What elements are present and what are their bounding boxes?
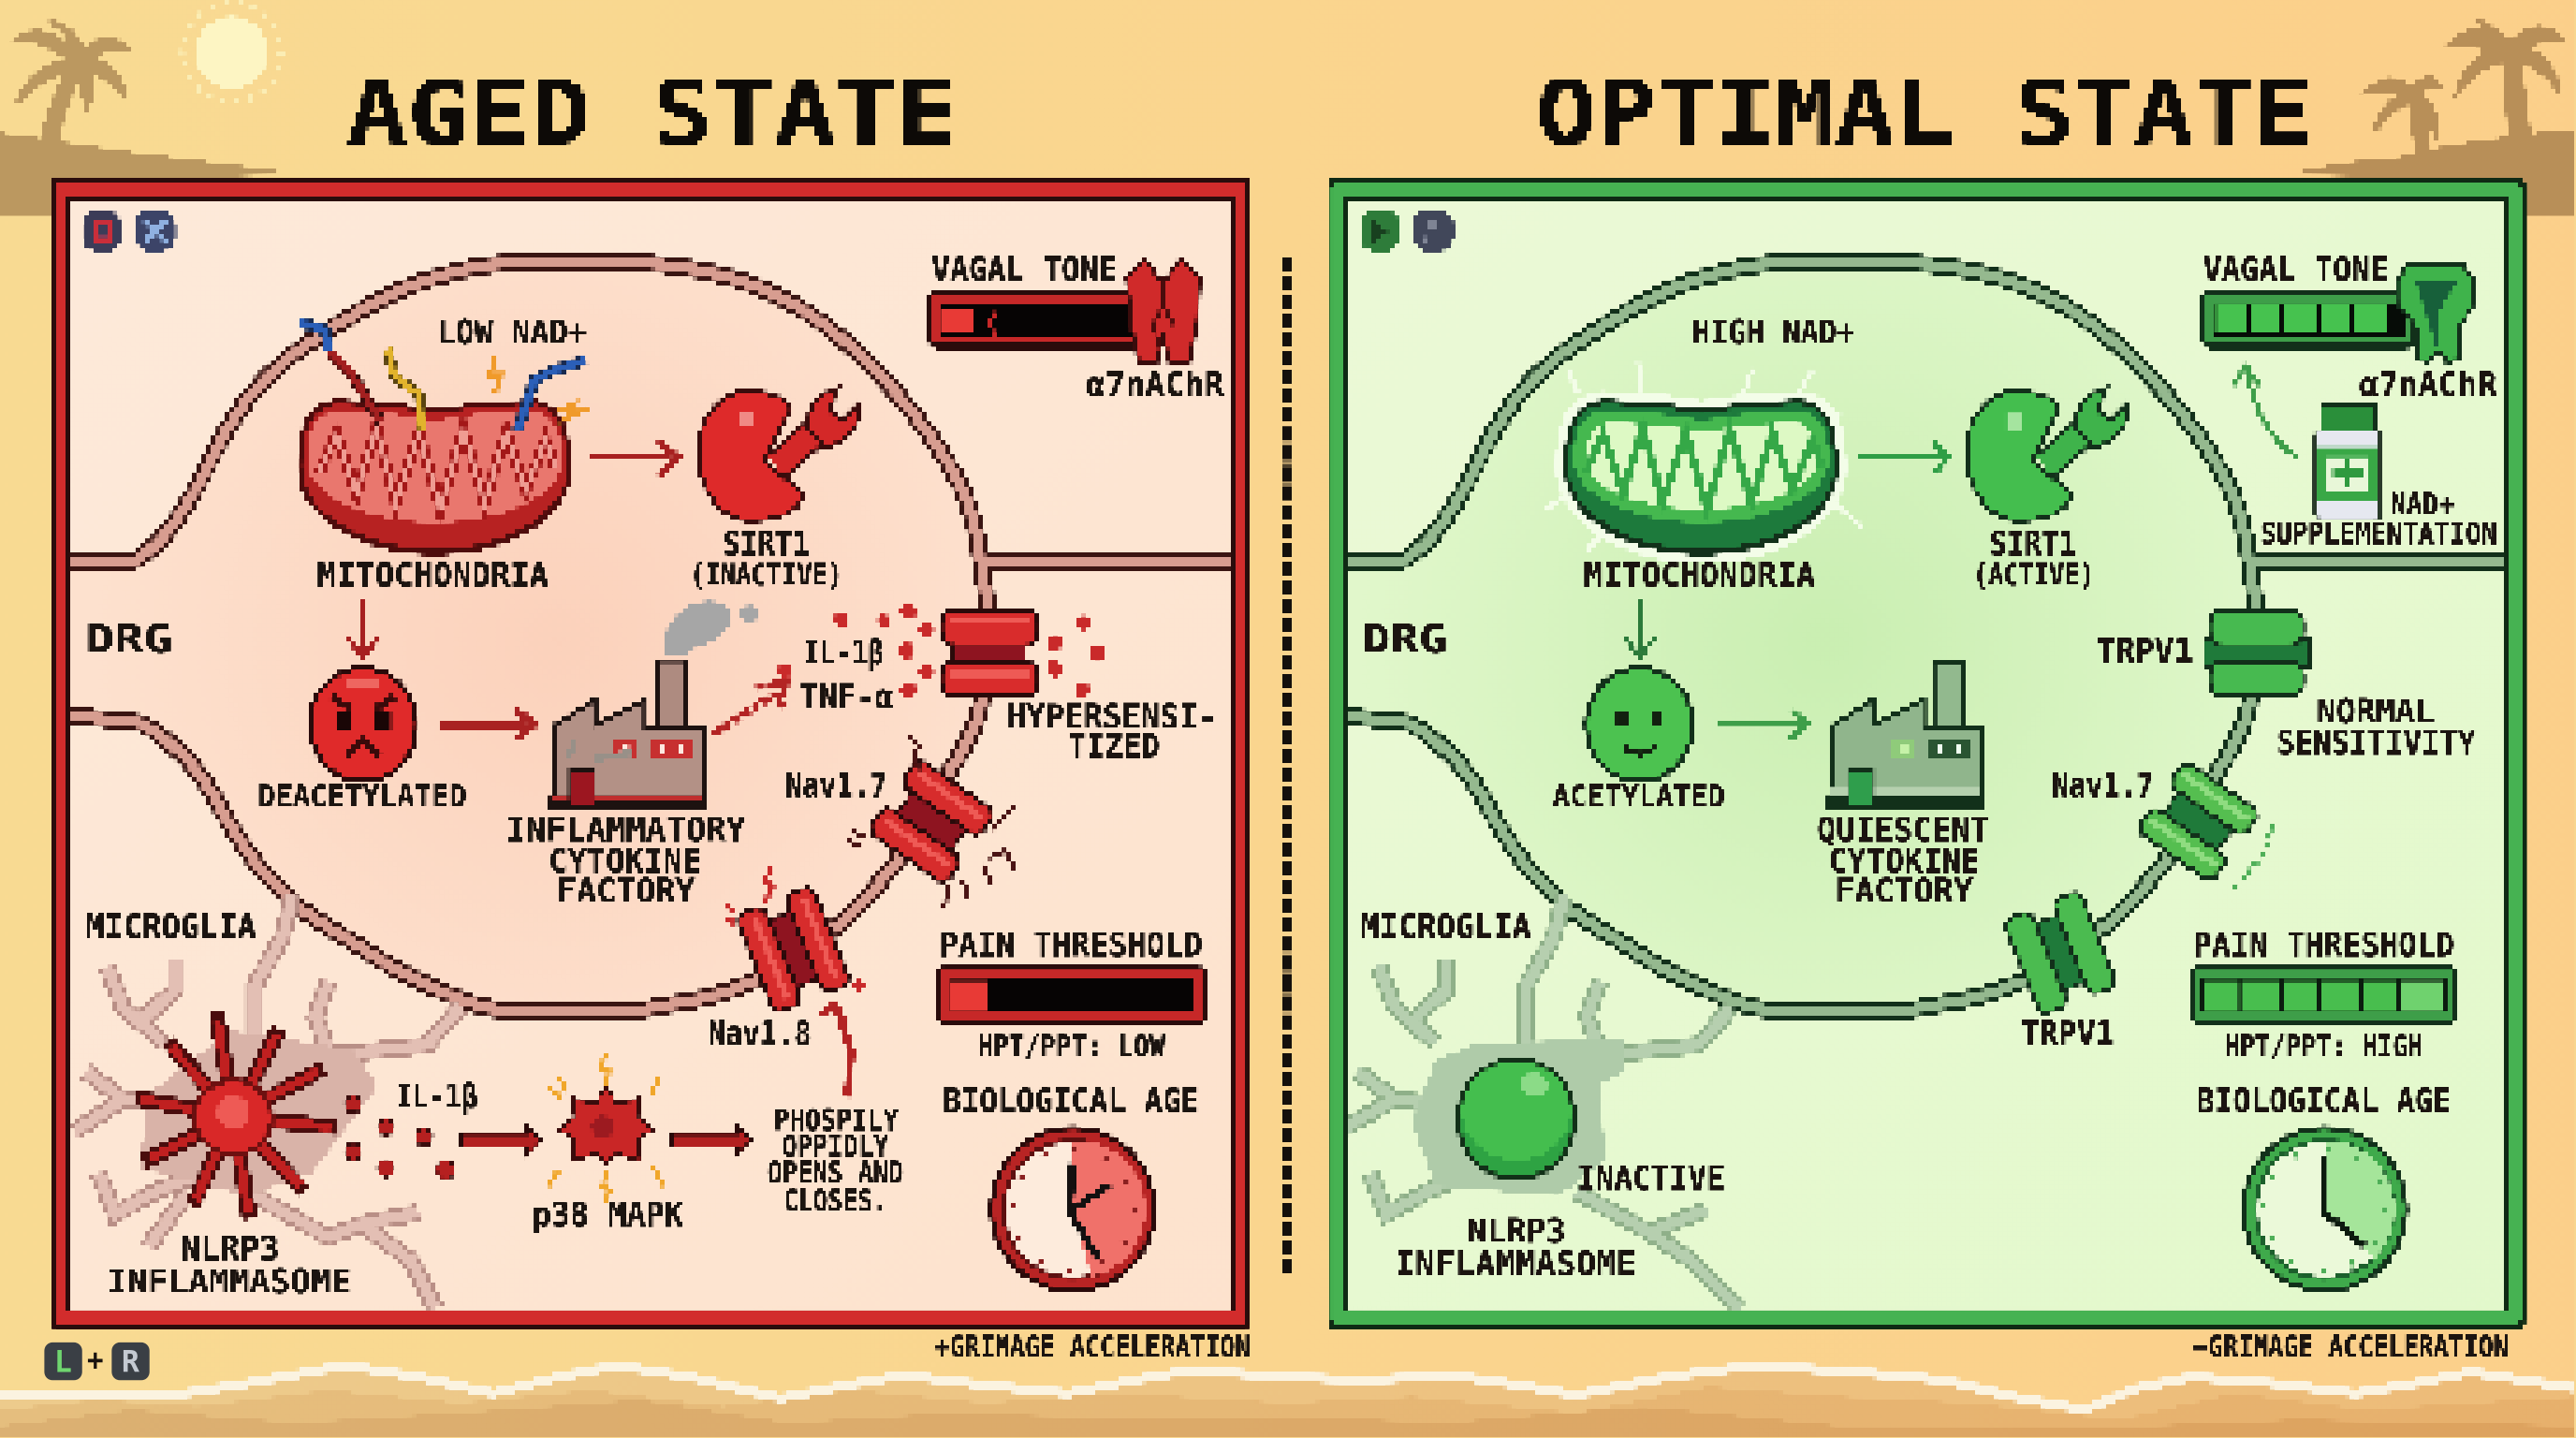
label: cytokines: IL-1β <box>803 634 884 672</box>
label: factory <box>1817 812 1989 911</box>
label: NLRP3 inflammasome: NLRP3 <box>181 1230 279 1269</box>
IL-1b particles <box>345 1096 454 1179</box>
icon: biological age clock <box>2241 1125 2408 1293</box>
label: NLRP3 inflammasome <box>1395 1212 1636 1284</box>
pain sparks near Nav1.7 <box>846 736 1016 907</box>
arrow: mitochondria to SIRT1 <box>590 440 677 477</box>
damaged mitochondrial DNA strands <box>299 322 588 431</box>
arrow: factory to cytokines <box>713 683 785 735</box>
label: normal sensitivity: SENSITIVITY <box>2277 725 2476 763</box>
title: optimal state: OPTIMAL STATE <box>1536 60 2313 166</box>
button icons top <box>1360 211 1454 252</box>
button icons top <box>82 211 176 252</box>
L + R button hint: L <box>54 1346 72 1380</box>
label: vagal tone: VAGAL TONE <box>931 251 1117 289</box>
label: deacetylated: DEACETYLATED <box>258 781 466 814</box>
label: HPT/PPT low: HPT/PPT: LOW <box>977 1031 1165 1064</box>
panel frame green <box>1327 178 2525 1329</box>
label: phospho text: PHOSPILY <box>774 1105 899 1138</box>
label: p38 MAPK: p38 MAPK <box>533 1196 683 1234</box>
arrow: phosphorylation to Nav1.8 <box>822 1005 851 1097</box>
label: SIRT1 inactive <box>690 525 842 593</box>
label: microglia: MICROGLIA <box>1360 908 1531 946</box>
vagal tone meter full <box>2202 290 2415 349</box>
label: mitochondria: MITOCHONDRIA <box>317 557 549 595</box>
icon: mitochondrion damaged <box>298 399 572 555</box>
arrow: face to factory <box>440 710 534 740</box>
label: receptor: α7nAChR <box>1086 366 1224 404</box>
label: hypersensitized: HYPERSENSI- <box>1007 698 1218 737</box>
icon: biological age clock <box>989 1125 1157 1293</box>
icon: TRPV1 channel <box>942 609 1038 697</box>
icon: Nav1.8 channel <box>736 886 851 1014</box>
label: factory: CYTOKINE <box>1828 843 1980 881</box>
cytokine particles <box>778 603 1105 698</box>
label: DRG: DRG <box>85 616 172 662</box>
arrow: mitochondria to deacetylated <box>348 600 378 657</box>
arrow: mitochondria to SIRT1 <box>1860 442 1949 473</box>
arrow: p38 to phosphorylation <box>672 1123 753 1157</box>
label: factory <box>506 812 746 911</box>
label: factory: FACTORY <box>557 873 695 911</box>
label: acetylated: ACETYLATED <box>1553 781 1725 814</box>
label: HPT/PPT high: HPT/PPT: HIGH <box>2224 1031 2423 1064</box>
icon: SIRT1 enzyme inactive <box>698 388 858 521</box>
label: pain threshold: PAIN THRESHOLD <box>2193 926 2454 964</box>
label: SIRT1 active: SIRT1 <box>1989 525 2076 564</box>
DRG neuron membrane <box>50 263 1249 1012</box>
label: phospho text <box>768 1105 903 1219</box>
icon: a7nAChR open receptor <box>2397 265 2474 363</box>
label: NAD+ supplementation: NAD+ <box>2391 488 2454 521</box>
label: IL-1b: IL-1β <box>396 1078 478 1116</box>
label: TRPV1 lower: TRPV1 <box>2021 1015 2115 1053</box>
label: SIRT1 active <box>1973 525 2095 593</box>
label: cytokines: TNF-α <box>800 678 894 716</box>
pain threshold meter <box>936 966 1206 1023</box>
label: mitochondria: MITOCHONDRIA <box>1584 557 1816 595</box>
label: hypersensitized: TIZED <box>1068 727 1160 766</box>
label: factory: CYTOKINE <box>549 843 701 881</box>
sun <box>183 4 281 102</box>
panel frame red <box>51 178 1251 1329</box>
label: factory: FACTORY <box>1835 873 1973 911</box>
label: hypersensitized <box>1007 698 1218 766</box>
icon: mitochondrion healthy <box>1546 361 1862 564</box>
pain threshold meter full <box>2190 966 2458 1023</box>
icon: smoke <box>664 601 758 657</box>
icon: NAD+ supplement bottle <box>2315 404 2380 520</box>
footnote: aged: +GRIMAGE ACCELERATION <box>935 1331 1251 1365</box>
label: normal sensitivity <box>2277 693 2476 763</box>
label: SIRT1 inactive: (INACTIVE) <box>690 559 842 593</box>
footnote: optimal: −GRIMAGE ACCELERATION <box>2193 1331 2509 1365</box>
icon: Nav1.7 channel <box>2136 760 2261 883</box>
icon: SIRT1 enzyme active <box>1967 388 2127 521</box>
label: receptor: α7nAChR <box>2359 366 2497 404</box>
label: phospho text: CLOSES. <box>783 1185 887 1219</box>
icon: TRPV1 lower channel <box>2003 890 2117 1016</box>
icon: p38 MAPK burst <box>549 1051 664 1203</box>
icon: normal signal mark <box>2234 825 2274 889</box>
label: normal sensitivity: NORMAL <box>2317 693 2435 731</box>
label: inactive: INACTIVE <box>1577 1160 1725 1198</box>
divider dashed line <box>1285 258 1290 1275</box>
label: biological age: BIOLOGICAL AGE <box>2197 1082 2452 1121</box>
label: NLRP3 inflammasome: NLRP3 <box>1467 1212 1566 1251</box>
icon: angry face deacetylated <box>307 666 419 784</box>
label: NAD+ supplementation <box>2261 488 2497 551</box>
icon: a7nAChR receptor <box>1127 259 1199 363</box>
arrow: mitochondria to acetylated <box>1625 598 1654 657</box>
label: vagal tone: VAGAL TONE <box>2203 251 2389 289</box>
arrow: supplementation to receptor <box>2234 365 2298 459</box>
panel labels: optimal state <box>1360 251 2497 1284</box>
label: NLRP3 inflammasome: INFLAMMASOME <box>1395 1245 1636 1284</box>
label: NLRP3 inflammasome: INFLAMMASOME <box>107 1263 352 1301</box>
label: cytokines <box>800 634 894 716</box>
label: DRG: DRG <box>1362 616 1447 662</box>
panel: aged state <box>50 178 1251 1329</box>
label: factory: INFLAMMATORY <box>506 812 746 850</box>
label: Nav1.7: Nav1.7 <box>2052 767 2154 805</box>
icon: TRPV1 channel <box>2204 609 2310 697</box>
label: SIRT1 inactive: SIRT1 <box>723 525 810 564</box>
label: microglia: MICROGLIA <box>85 908 256 946</box>
icon: NLRP3 inactive nucleus <box>1456 1057 1577 1181</box>
island and palms, right <box>2302 22 2576 215</box>
vagal tone meter <box>929 290 1142 349</box>
label: pain threshold: PAIN THRESHOLD <box>940 926 1203 964</box>
island and palm, left <box>0 22 274 215</box>
title: aged state: AGED STATE <box>346 60 958 166</box>
label: Nav1.7: Nav1.7 <box>785 767 887 805</box>
label: NAD+ supplementation: SUPPLEMENTATION <box>2261 518 2497 551</box>
NLRP3 inflammasome spikes <box>135 1012 337 1219</box>
label: NLRP3 inflammasome <box>107 1230 352 1301</box>
label: low NAD+: LOW NAD+ <box>437 314 587 352</box>
label: phospho text: OPPIDLY <box>782 1131 889 1165</box>
label: Nav1.8: Nav1.8 <box>708 1015 812 1053</box>
L + R button hint: + <box>87 1344 104 1378</box>
label: high NAD+: HIGH NAD+ <box>1692 314 1855 352</box>
label: phospho text: OPENS AND <box>768 1157 903 1191</box>
icon: smiling face acetylated <box>1584 666 1695 784</box>
label: biological age: BIOLOGICAL AGE <box>943 1082 1199 1121</box>
label: factory: QUIESCENT <box>1817 812 1989 850</box>
label: TRPV1: TRPV1 <box>2097 632 2193 670</box>
panel labels: aged state <box>85 251 1224 1301</box>
sand and waves <box>0 1365 2576 1438</box>
microglia <box>74 896 460 1308</box>
label: SIRT1 active: (ACTIVE) <box>1973 559 2095 593</box>
L + R button hint <box>44 1343 150 1380</box>
icon: Nav1.7 channel <box>867 758 996 886</box>
icon: quiescent cytokine factory <box>1827 662 1984 809</box>
icon: inflammatory cytokine factory <box>547 661 707 809</box>
sparks near Nav1.8 <box>724 866 866 992</box>
arrow: IL-1b to p38 <box>461 1123 542 1157</box>
panel: optimal state <box>1318 178 2533 1329</box>
L + R button hint: R <box>122 1346 140 1380</box>
arrow: face to factory <box>1717 710 1808 740</box>
microglia resting <box>1338 896 1740 1308</box>
DRG neuron membrane <box>1318 263 2533 1012</box>
